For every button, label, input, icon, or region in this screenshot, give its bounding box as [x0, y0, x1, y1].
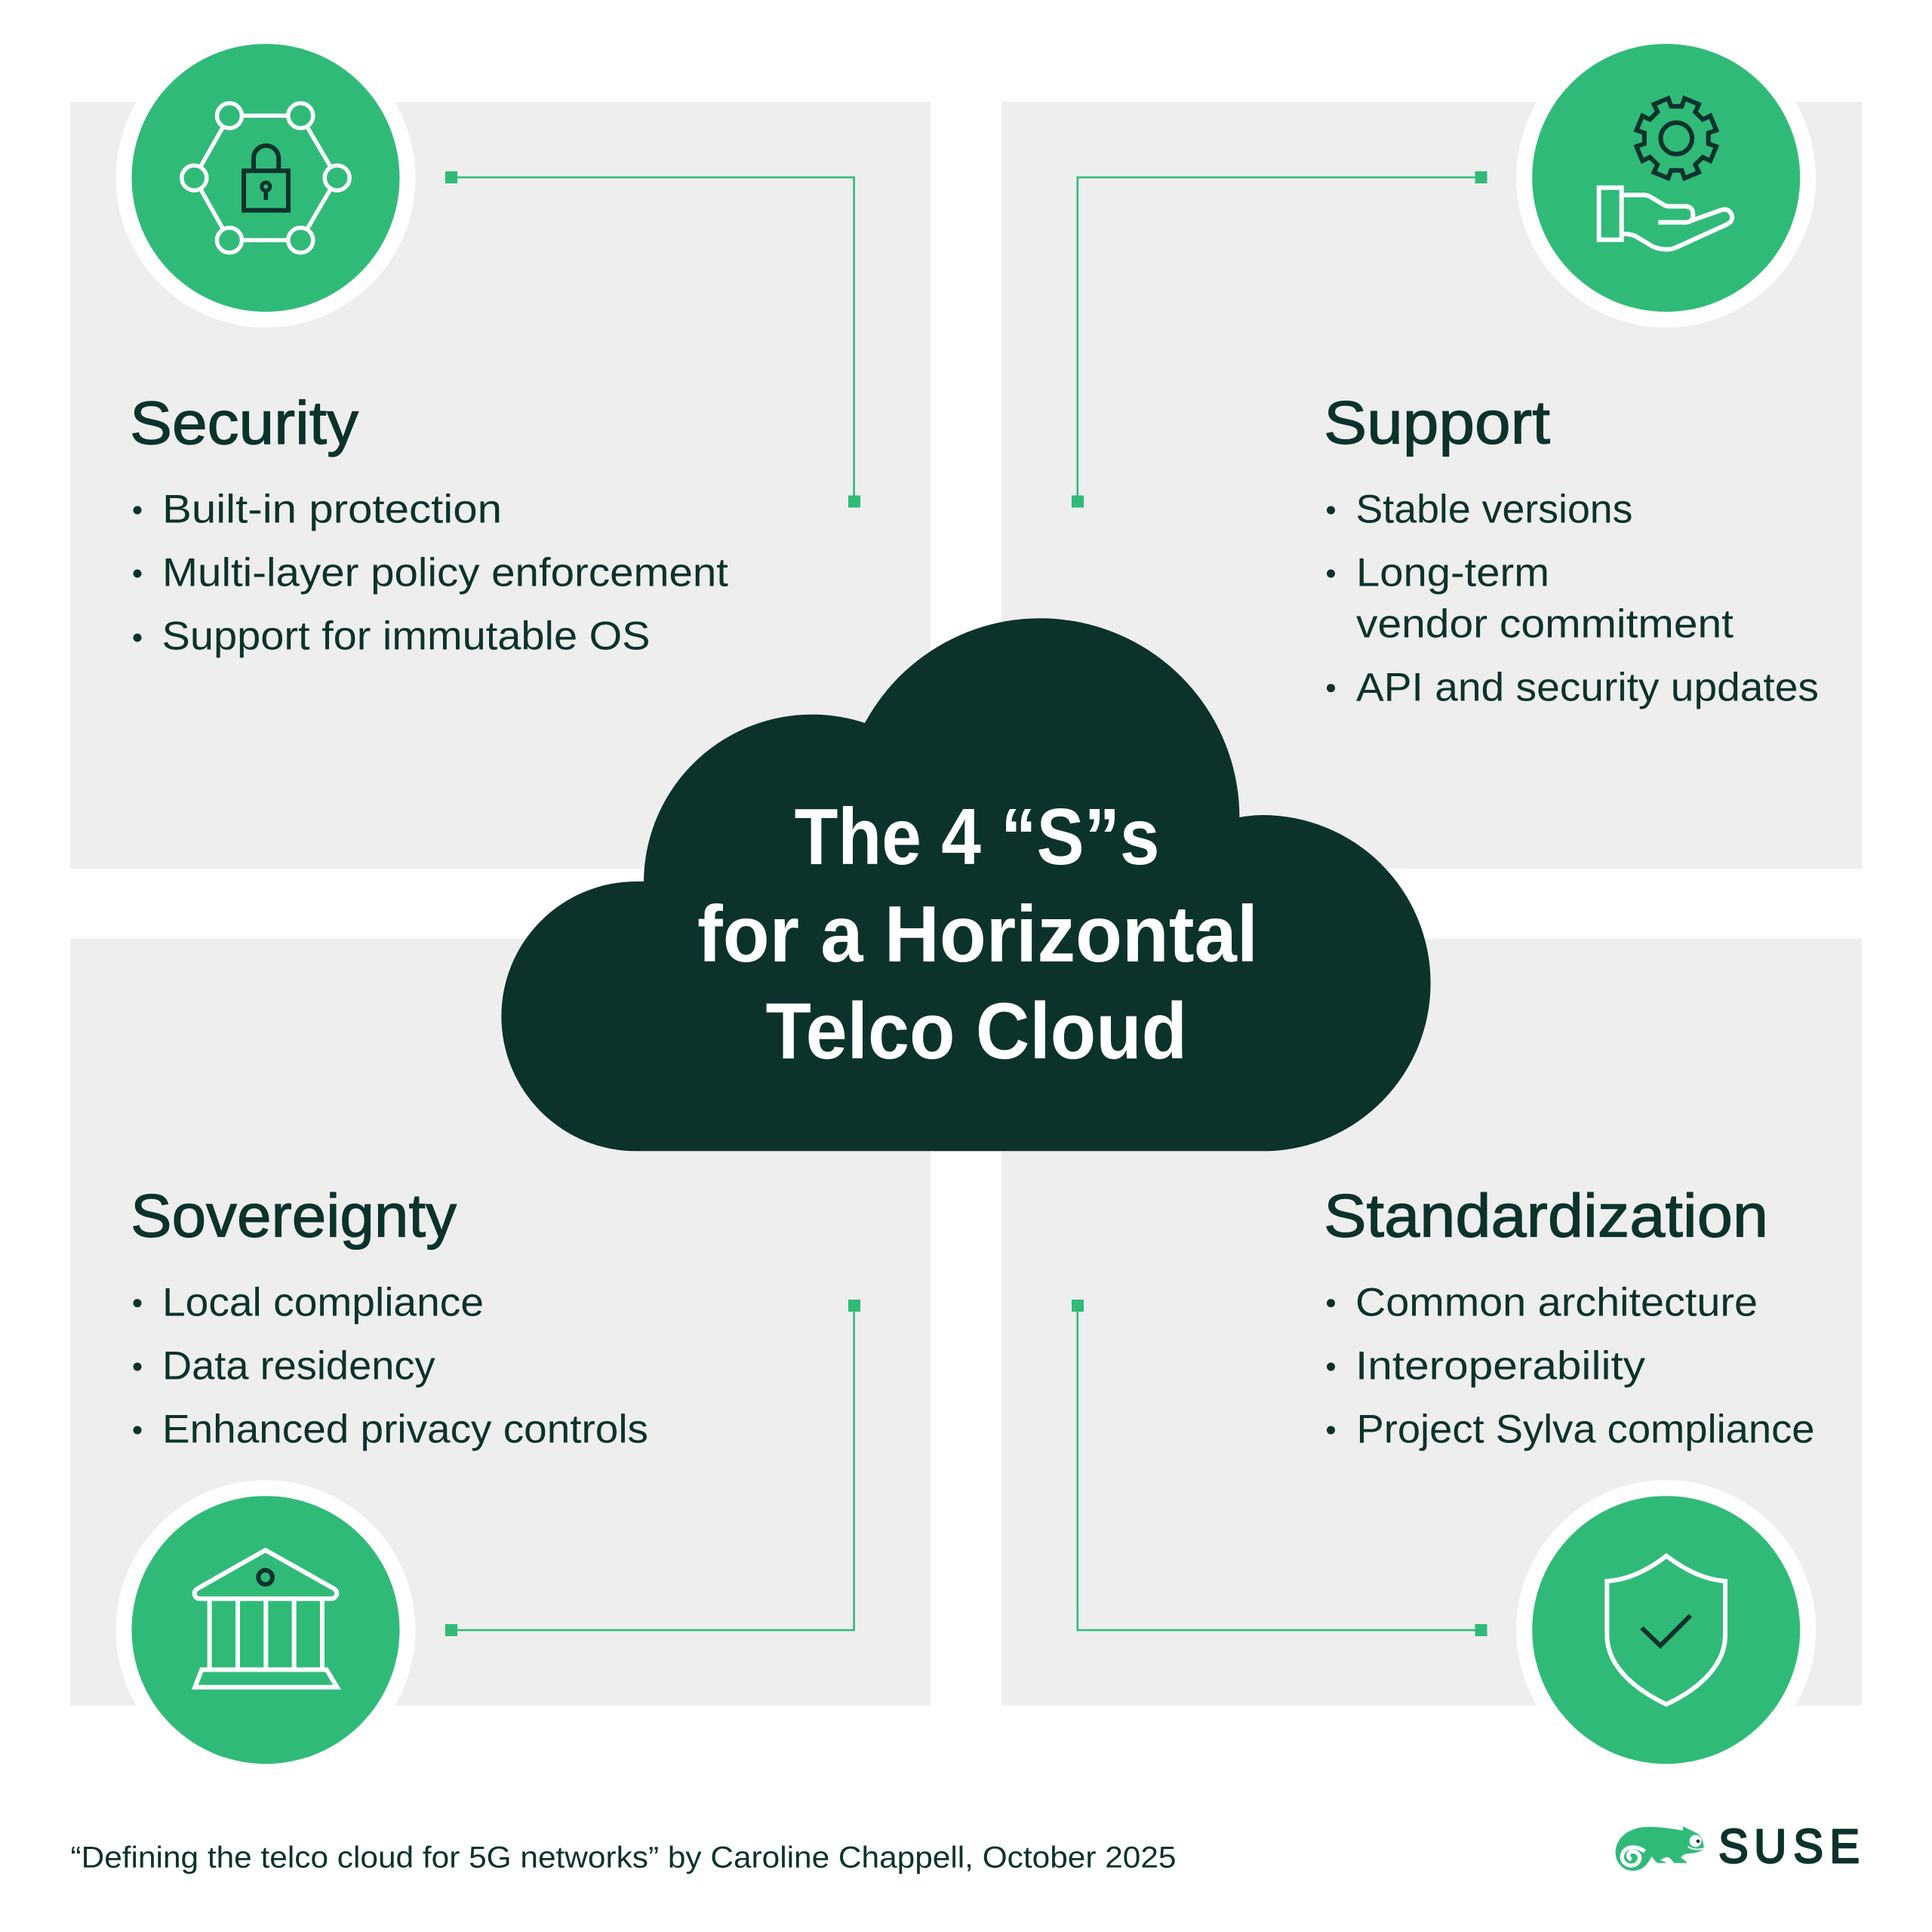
- title: The 4 “S”s: [795, 792, 1160, 881]
- source citation: “Defining the telco cloud for 5G networks” by Caroline Chappell, October 2025: [71, 1841, 1176, 1874]
- cloud with title: [501, 618, 1431, 1151]
- connector: support: [1072, 171, 1487, 507]
- connector: standardization: [1072, 1300, 1487, 1636]
- list: standardization: Common architecture: [1355, 1280, 1758, 1324]
- list: security: Support for immutable OS: [162, 614, 651, 659]
- heading: standardization: Standardization: [1324, 1182, 1768, 1250]
- list: standardization: [1327, 1280, 1814, 1452]
- list: support: API and security updates: [1356, 665, 1819, 709]
- title: for a Horizontal: [697, 890, 1258, 979]
- panel: support: [1001, 28, 1862, 869]
- wordmark: SUSE: [1718, 1820, 1860, 1872]
- list: support: [1327, 488, 1819, 709]
- list: standardization: Interoperability: [1355, 1343, 1646, 1388]
- icon: network lock: [116, 28, 415, 328]
- list: security: Built-in protection: [162, 488, 502, 532]
- heading: sovereignty: Sovereignty: [131, 1182, 457, 1250]
- list: sovereignty: Local compliance: [162, 1280, 484, 1324]
- list: sovereignty: Data residency: [162, 1343, 435, 1388]
- heading: support: Support: [1324, 389, 1550, 457]
- list: support: Long-term: [1356, 551, 1549, 595]
- panel: standardization: [1001, 939, 1862, 1780]
- heading: security: Security: [130, 389, 359, 457]
- list: support: Stable versions: [1355, 488, 1633, 532]
- list: sovereignty: [133, 1280, 648, 1452]
- list: sovereignty: Enhanced privacy controls: [162, 1407, 648, 1452]
- list: standardization: Project Sylva compliance: [1357, 1407, 1814, 1452]
- connector: sovereignty: [445, 1300, 860, 1636]
- panel: security: [70, 28, 931, 869]
- icon: government building: [116, 1480, 415, 1780]
- list: security: Multi-layer policy enforcement: [162, 551, 728, 595]
- icon: hand with gear: [1516, 28, 1816, 328]
- connector: security: [445, 171, 860, 507]
- icon: shield with check: [1516, 1480, 1816, 1780]
- panel: sovereignty: [70, 939, 931, 1780]
- logo: SUSE: [1616, 1820, 1860, 1872]
- list: support: vendor commitment: [1356, 601, 1734, 646]
- list: security: [133, 488, 728, 659]
- title: [697, 792, 1258, 1076]
- icon: chameleon: [1616, 1826, 1704, 1871]
- title: Telco Cloud: [765, 987, 1187, 1076]
